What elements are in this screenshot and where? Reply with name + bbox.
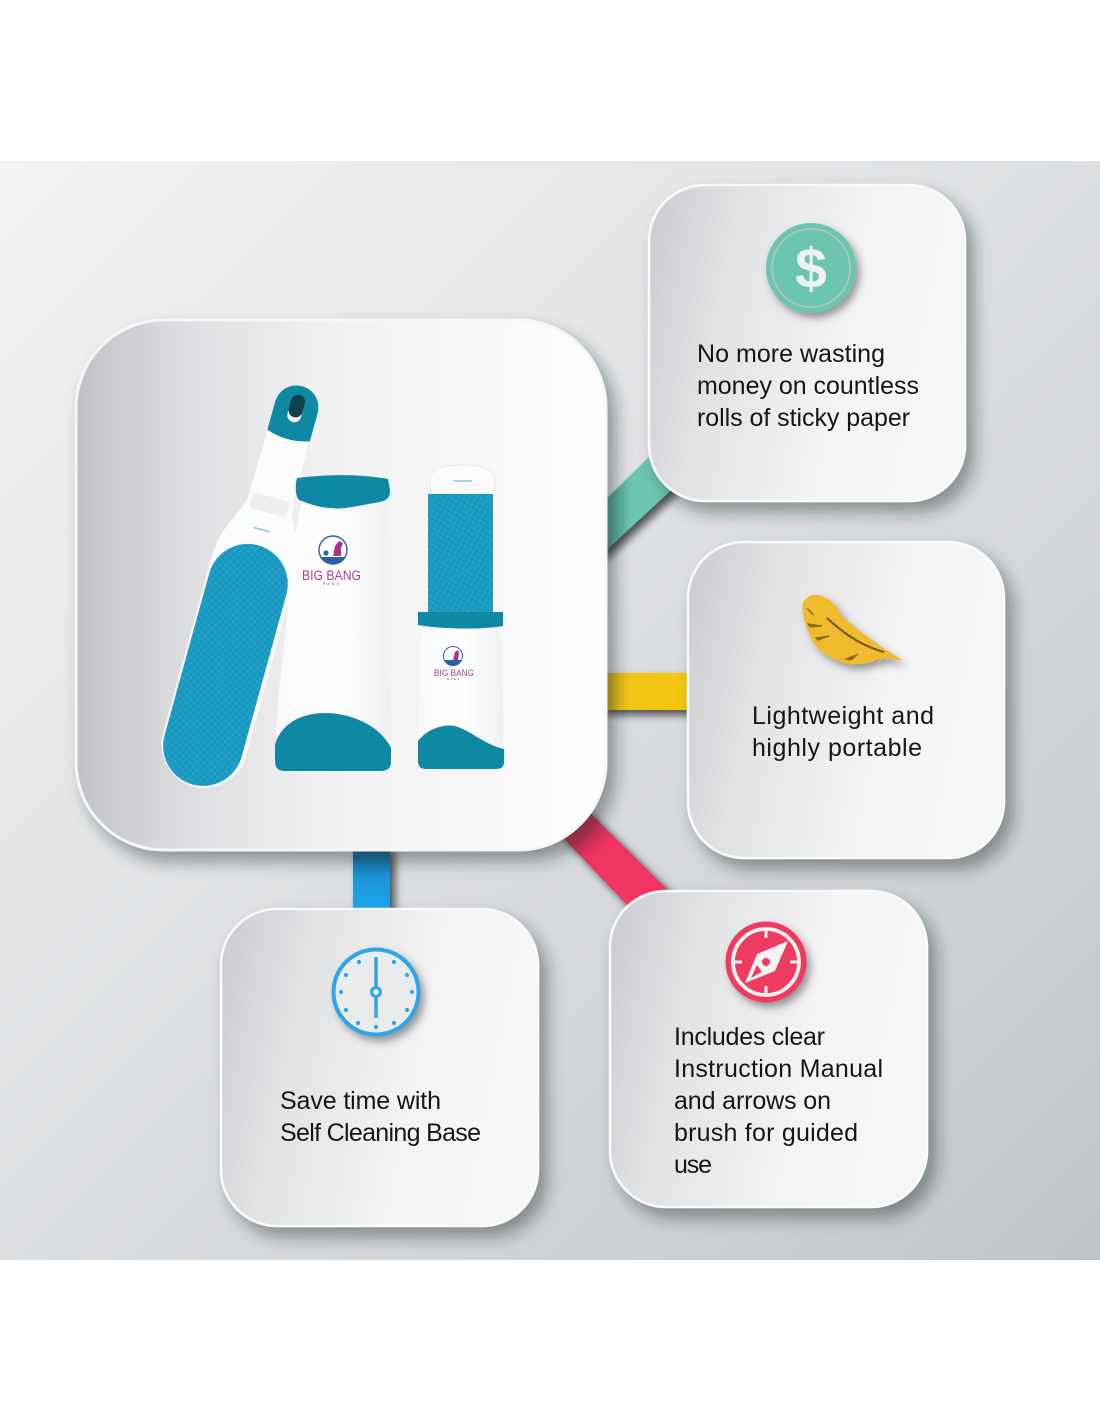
icon: dollar coin (766, 223, 856, 313)
panel: saves money (649, 185, 965, 501)
icon: feather (803, 595, 902, 664)
logo: big bang paws: BIG BANG (302, 568, 361, 583)
icon: clock (334, 950, 418, 1034)
logo: big bang paws small: BIG BANG (434, 668, 474, 678)
text: instruction manual: and arrows on (674, 1087, 831, 1115)
panel: instruction manual (610, 891, 927, 1207)
text: saves money: money on countless (697, 372, 919, 400)
product: small brush (418, 465, 504, 769)
text: instruction manual: use (674, 1151, 712, 1179)
logo: big bang paws small: PAWS (448, 677, 460, 681)
connector: blue (353, 845, 390, 911)
text: saves money: rolls of sticky paper (697, 404, 910, 432)
icon: compass (726, 922, 806, 1002)
text: instruction manual: Instruction Manual (674, 1055, 883, 1083)
text: lightweight: highly portable (752, 734, 922, 762)
background band (0, 161, 1100, 1260)
text: save time: Save time with (280, 1087, 441, 1115)
connector: yellow (600, 673, 692, 710)
logo: big bang paws: PAWS (323, 582, 341, 586)
connector: red (552, 808, 668, 908)
logo: big bang paws (302, 536, 361, 586)
text: instruction manual: brush for guided (674, 1119, 858, 1147)
panel: product (76, 320, 606, 850)
product: large brush (152, 375, 345, 798)
product: self-cleaning base (275, 475, 392, 771)
panel: lightweight (688, 542, 1004, 858)
text: saves money: No more wasting (697, 340, 885, 368)
text: save time: Self Cleaning Base (280, 1119, 481, 1147)
panel: save time (221, 909, 538, 1226)
logo: big bang paws small (434, 646, 474, 681)
text: lightweight: Lightweight and (752, 702, 934, 730)
text: instruction manual: Includes clear (674, 1023, 825, 1051)
icon: dollar coin: $ (795, 237, 827, 301)
connector: green (598, 454, 680, 558)
